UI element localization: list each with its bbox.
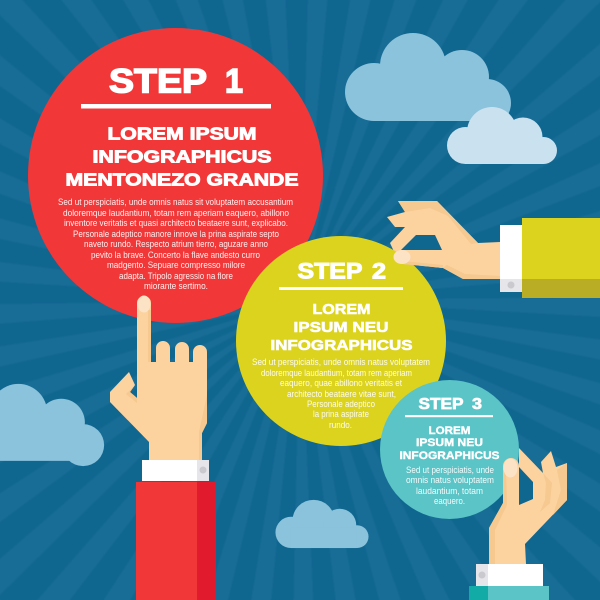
- step 2 heading: 2: [372, 258, 386, 284]
- step 2 body text: rundo.: [329, 420, 352, 430]
- hand: pointing up with red sleeve: [110, 296, 216, 600]
- step 1 body text: madgento. Sepuare compresso milore: [107, 260, 245, 270]
- step 1 body text: Personale adeptico manore innove la prina aspirate septo: [73, 229, 279, 239]
- step 1 subtitle: [66, 124, 298, 190]
- step 3 subtitle: [400, 425, 500, 462]
- step 2 heading: STEP: [298, 258, 362, 284]
- step 2 rule: [279, 287, 403, 290]
- step 1 heading: [109, 62, 243, 100]
- step 1 rule: [81, 104, 271, 108]
- hand: bottom right with sleeve: [469, 448, 567, 600]
- step 2 subtitle: INFOGRAPHICUS: [270, 337, 412, 354]
- step 2 body text: eaquero, quae abillono veritatis et: [280, 378, 402, 388]
- step 3 subtitle: INFOGRAPHICUS: [400, 450, 500, 462]
- step 3 subtitle: IPSUM NEU: [416, 437, 483, 449]
- step 1 body text: [58, 197, 293, 291]
- cloud: top small: [447, 107, 557, 164]
- step 3 heading: [418, 396, 482, 413]
- step 1 body text: adapta. Tripolo agressio na flore: [119, 271, 233, 281]
- step 2 subtitle: IPSUM NEU: [294, 319, 388, 336]
- panel: step 1 circle: [28, 28, 323, 323]
- step 3 rule: [405, 415, 493, 417]
- step 2 heading: [298, 258, 386, 284]
- step 1 subtitle: INFOGRAPHICUS: [92, 146, 272, 166]
- step 1 body text: Sed ut perspiciatis, unde omnis natus sit voluptatem accusantium: [58, 197, 293, 207]
- step 3 heading: 3: [472, 396, 482, 413]
- step 2 subtitle: [270, 301, 412, 354]
- step 3 subtitle: LOREM: [428, 425, 470, 437]
- step 1 body text: naveto rundo. Respecto atrium tierro, aguzare anno: [84, 239, 268, 249]
- step 1 body text: miorante sertimo.: [144, 281, 208, 291]
- step 3 body text: Sed ut perspiciatis, unde: [406, 465, 494, 475]
- step 2 body text: Sed ut perspiciatis, unde omnis natus voluptatem: [252, 357, 430, 367]
- hand: right with sleeve: [387, 201, 600, 298]
- step 1 heading: 1: [225, 62, 243, 100]
- step 3 heading: STEP: [418, 396, 464, 413]
- step 1 subtitle: LOREM IPSUM: [108, 124, 256, 144]
- step 1 body text: pevito la brave. Concerto la flave andesto curro: [91, 250, 260, 260]
- step 2 body text: la prina aspirate: [313, 409, 369, 419]
- cloud: bottom: [275, 500, 369, 548]
- step 3 body text: [406, 465, 494, 506]
- step 2 body text: architecto beataere vitae sunt,: [287, 389, 396, 399]
- thumb of right hand over step 2: [394, 250, 450, 268]
- step 1 heading: STEP: [109, 62, 207, 100]
- step 3 body text: eaquero.: [434, 496, 465, 506]
- step 2 body text: Personale adeptico: [307, 399, 375, 409]
- panel: step 3 circle: [380, 380, 519, 519]
- step 2 body text: doloremque laudantium, totam rem aperiam: [261, 368, 412, 378]
- step 3 body text: laudantium, totam: [416, 486, 483, 496]
- step 1 body text: doloremque laudantium, totam rem aperiam eaquero, abillono: [63, 208, 289, 218]
- step 2 subtitle: LOREM: [312, 301, 370, 318]
- cloud: top large: [345, 33, 511, 127]
- step 3 body text: omnis natus voluptatem: [406, 475, 494, 485]
- step 1 subtitle: MENTONEZO GRANDE: [66, 170, 298, 190]
- step 1 body text: inventore veritatis et quasi architecto beataere sunt, explicabo.: [64, 218, 288, 228]
- panel: step 2 circle: [236, 236, 446, 446]
- step 2 body text: [252, 357, 430, 430]
- cloud: left: [0, 384, 104, 466]
